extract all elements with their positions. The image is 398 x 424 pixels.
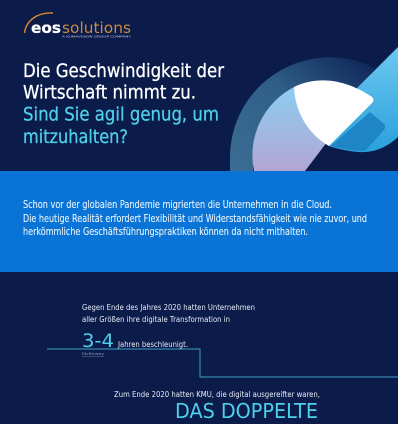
blue band: [0, 171, 398, 272]
stat headline: DAS DOPPELTE: [175, 399, 318, 423]
stat block 3-4 years: [82, 303, 255, 356]
title white line 1: Die Geschwindigkeit der: [23, 60, 224, 82]
abstract graphic: [230, 47, 398, 171]
graphic: blue blade: [329, 47, 398, 152]
graphic: outer ring: [230, 57, 375, 171]
stat intro line 2: aller Größen ihre digitale Transformation in: [82, 315, 230, 324]
band text: [23, 199, 367, 238]
band line 3: herkömmliche Geschäftsführungspraktiken können da nicht mithalten.: [23, 226, 308, 238]
title white line 2: Wirtschaft nimmt zu.: [23, 82, 196, 104]
stat block doubled: [114, 390, 320, 423]
stat suffix: Jahren beschleunigt.: [117, 340, 188, 349]
connector line: [47, 349, 398, 377]
title cyan line 2: mitzuhalten?: [23, 126, 128, 148]
logo: [24, 13, 132, 38]
icon: logo arc: [24, 13, 53, 33]
graphic: blue shadow: [331, 112, 385, 151]
logo wordmark: eos: [31, 19, 61, 37]
graphic: white blade: [294, 80, 374, 146]
logo wordmark solutions: solutions: [62, 19, 131, 37]
title cyan line 1: Sind Sie agil genug, um: [23, 104, 219, 126]
stat intro line 1: Gegen Ende des Jahres 2020 hatten Unternehmen: [82, 303, 255, 312]
stat number: 3-4: [82, 330, 114, 352]
logo tagline: A KUMAVISION GROUP COMPANY: [62, 34, 132, 38]
title: [23, 60, 224, 148]
graphic: lavender blade: [252, 87, 326, 171]
source: McKinsey: [82, 352, 105, 356]
stat intro: Zum Ende 2020 hatten KMU, die digital ausgereifter waren,: [114, 390, 320, 399]
